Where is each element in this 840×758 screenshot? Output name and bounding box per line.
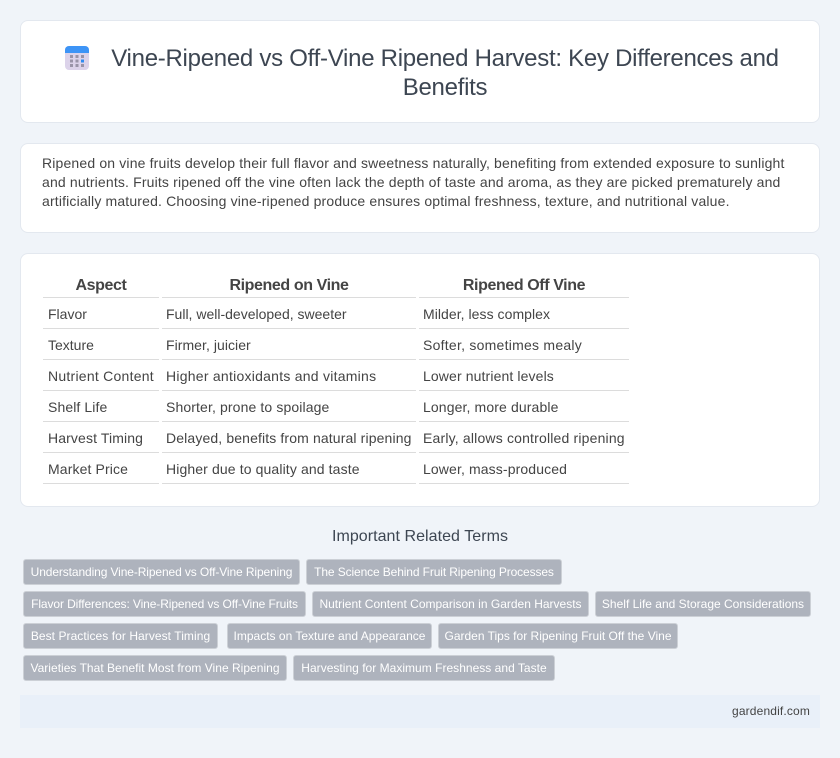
comparison table: Delayed, benefits from natural ripening bbox=[166, 430, 412, 446]
related terms tags: Garden Tips for Ripening Fruit Off the Vine bbox=[444, 629, 672, 643]
comparison table: Nutrient Content bbox=[48, 368, 154, 384]
comparison table: Early, allows controlled ripening bbox=[423, 430, 625, 446]
comparison table: Firmer, juicier bbox=[166, 337, 251, 353]
comparison table: Market Price bbox=[48, 461, 128, 477]
comparison table: Higher due to quality and taste bbox=[166, 461, 360, 477]
footer bbox=[20, 695, 820, 728]
related terms tags: The Science Behind Fruit Ripening Processes bbox=[314, 565, 554, 579]
related terms tags: Varieties That Benefit Most from Vine Ripening bbox=[30, 661, 280, 675]
related terms tags: Impacts on Texture and Appearance bbox=[234, 629, 425, 643]
related terms tags: Understanding Vine-Ripened vs Off-Vine Ripening bbox=[31, 565, 292, 579]
intro text bbox=[42, 155, 785, 209]
comparison table: Lower, mass-produced bbox=[423, 461, 567, 477]
comparison table: Shelf Life bbox=[48, 399, 107, 415]
title: Vine-Ripened vs Off-Vine Ripened Harvest: Key Differences and Benefits bbox=[111, 45, 779, 101]
intro text: and nutrients. Fruits ripened off the vine often lack the depth of taste and aroma, as they are picked prematurely and bbox=[42, 174, 780, 190]
comparison table: Full, well-developed, sweeter bbox=[166, 306, 347, 322]
panel: title card bbox=[20, 20, 820, 123]
panel: intro text card bbox=[20, 143, 820, 233]
related terms tags: Harvesting for Maximum Freshness and Taste bbox=[301, 661, 547, 675]
comparison table: Ripened Off Vine bbox=[463, 277, 585, 294]
comparison table: Ripened on Vine bbox=[229, 277, 349, 294]
comparison table: Lower nutrient levels bbox=[423, 368, 554, 384]
heading: related terms: Important Related Terms bbox=[332, 528, 508, 545]
related terms tags: Best Practices for Harvest Timing bbox=[31, 629, 210, 643]
related terms tags: Shelf Life and Storage Considerations bbox=[602, 597, 804, 611]
comparison table: Texture bbox=[48, 337, 94, 353]
related terms tags bbox=[23, 559, 811, 681]
comparison table: Higher antioxidants and vitamins bbox=[166, 368, 376, 384]
intro text: artificially matured. Choosing vine-ripened produce ensures optimal freshness, texture, and nutritional value. bbox=[42, 193, 730, 209]
comparison table: Milder, less complex bbox=[423, 306, 550, 322]
related terms tags: Nutrient Content Comparison in Garden Harvests bbox=[319, 597, 582, 611]
comparison table: Shorter, prone to spoilage bbox=[166, 399, 329, 415]
comparison table: Flavor bbox=[48, 306, 87, 322]
comparison table: Aspect bbox=[76, 277, 126, 294]
comparison table: Harvest Timing bbox=[48, 430, 143, 446]
comparison table: Softer, sometimes mealy bbox=[423, 337, 582, 353]
footer site name: gardendif.com bbox=[732, 704, 810, 718]
intro text: Ripened on vine fruits develop their full flavor and sweetness naturally, benefiting from extended exposure to sunlight bbox=[42, 155, 785, 171]
comparison table: Longer, more durable bbox=[423, 399, 558, 415]
comparison table bbox=[43, 277, 629, 484]
panel: comparison table card bbox=[20, 253, 820, 507]
related terms tags: Flavor Differences: Vine-Ripened vs Off-Vine Fruits bbox=[31, 597, 298, 611]
icon: calendar bbox=[65, 46, 89, 70]
